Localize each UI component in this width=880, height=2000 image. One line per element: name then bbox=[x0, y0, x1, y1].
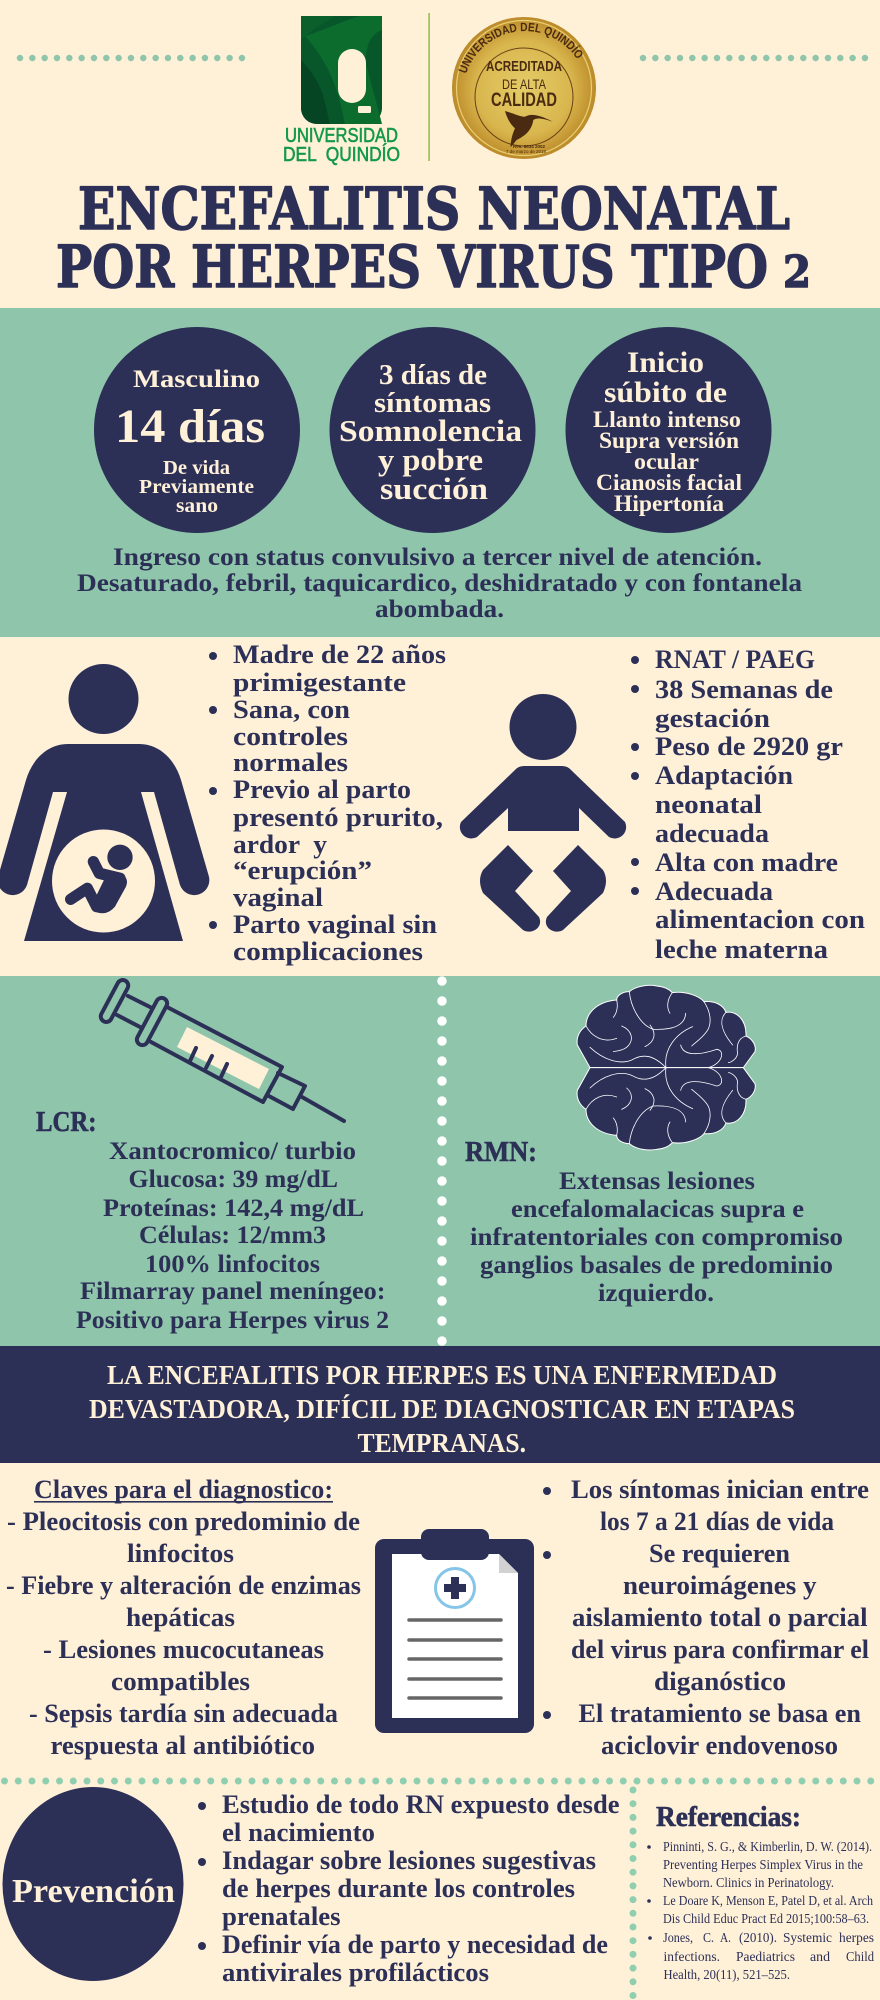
list: síntomas y tratamiento: Los síntomas inician entre bbox=[571, 1475, 869, 1504]
text: claves para el diagnostico: - Sepsis tardía sin adecuada bbox=[29, 1699, 338, 1728]
list: prevención: prenatales bbox=[222, 1902, 341, 1931]
circle: edad: De vida bbox=[163, 457, 230, 479]
accreditation seal: 7 de marzo de 2018 bbox=[506, 149, 547, 154]
logo divider bbox=[428, 13, 430, 161]
circle: inicio súbito: Hipertonía bbox=[614, 491, 724, 516]
text: LCR: Glucosa: 39 mg/dL bbox=[128, 1166, 338, 1193]
list: madre: primigestante bbox=[233, 668, 406, 697]
list: recién nacido: 38 Semanas de bbox=[655, 675, 833, 704]
circle: inicio súbito: súbito de bbox=[604, 376, 727, 409]
list: madre: Madre de 22 años bbox=[233, 640, 446, 669]
references bbox=[647, 1801, 874, 1983]
list: madre: “erupción” bbox=[233, 856, 372, 885]
circle: síntomas: 3 días de bbox=[379, 360, 487, 391]
list: recién nacido: leche materna bbox=[655, 935, 828, 964]
list: madre: vaginal bbox=[233, 883, 323, 912]
list: recién nacido: alimentacion con bbox=[655, 905, 866, 934]
banner: mensaje clave: TEMPRANAS. bbox=[358, 1428, 526, 1458]
icon: syringe bbox=[99, 978, 344, 1121]
circle: prevención bbox=[2, 1787, 184, 1981]
list: madre: complicaciones bbox=[233, 937, 423, 966]
text: ingreso: abombada. bbox=[375, 596, 504, 623]
list: recién nacido: adecuada bbox=[655, 819, 769, 848]
list: síntomas y tratamiento: El tratamiento se basa en bbox=[578, 1699, 862, 1728]
circle: inicio súbito: ocular bbox=[634, 449, 699, 474]
list: síntomas y tratamiento: aislamiento total o parcial bbox=[572, 1603, 868, 1632]
icon: pregnant mother bbox=[0, 664, 209, 941]
list: madre bbox=[209, 640, 446, 966]
text: claves para el diagnostico: respuesta al antibiótico bbox=[50, 1731, 315, 1760]
list: síntomas y tratamiento: Se requieren bbox=[649, 1539, 791, 1568]
text: claves para el diagnostico bbox=[6, 1475, 361, 1760]
reference list: Newborn. Clinics in Perinatology. bbox=[663, 1876, 834, 1891]
dotted accent right bbox=[643, 55, 867, 61]
text: LCR: Proteínas: 142,4 mg/dL bbox=[103, 1195, 364, 1222]
list: recién nacido: RNAT / PAEG bbox=[655, 645, 815, 674]
list: madre: controles bbox=[233, 722, 348, 751]
university logo bbox=[283, 16, 400, 166]
heading: claves: Claves para el diagnostico: bbox=[34, 1475, 333, 1504]
accreditation seal: ACREDITADA bbox=[486, 58, 562, 75]
title: 2 bbox=[783, 247, 811, 298]
panel: estudios bbox=[0, 976, 880, 1346]
circle: inicio súbito: Supra versión bbox=[599, 428, 739, 453]
list: madre: Sana, con bbox=[233, 695, 351, 724]
list: prevención: el nacimiento bbox=[222, 1818, 375, 1847]
circle: edad: sano bbox=[176, 495, 218, 517]
reference list: C. bbox=[703, 1931, 714, 1946]
list: prevención: de herpes durante los controles bbox=[222, 1874, 575, 1903]
circle: inicio súbito: Cianosis facial bbox=[596, 470, 742, 495]
title bbox=[56, 175, 811, 301]
panel: antecedentes bbox=[0, 637, 880, 976]
circle: síntomas bbox=[330, 327, 536, 533]
text: claves para el diagnostico: - Lesiones mucocutaneas bbox=[43, 1635, 324, 1664]
circle: síntomas: síntomas bbox=[374, 388, 491, 419]
banner: mensaje clave bbox=[0, 1346, 880, 1463]
list: recién nacido: Adaptación bbox=[655, 761, 794, 790]
list: recién nacido: gestación bbox=[655, 704, 771, 733]
accreditation seal: Res. 8834 2002 bbox=[513, 144, 546, 149]
text: ingreso: Desaturado, febril, taquicardico, deshidratado y con fontanela bbox=[77, 570, 803, 597]
list: recién nacido bbox=[631, 645, 866, 964]
dotted accent left bbox=[20, 55, 242, 61]
text: RMN: ganglios basales de predominio bbox=[480, 1252, 833, 1279]
circle: prevención: Prevención bbox=[12, 1873, 175, 1910]
text: LCR: Positivo para Herpes virus 2 bbox=[76, 1307, 389, 1334]
list: síntomas y tratamiento: del virus para confirmar el bbox=[571, 1635, 869, 1664]
text: claves para el diagnostico: hepáticas bbox=[126, 1603, 235, 1632]
dotted divider bbox=[437, 981, 447, 1342]
list: prevención: Definir vía de parto y necesidad de bbox=[222, 1930, 608, 1959]
list: madre: normales bbox=[233, 748, 348, 777]
text: ingreso bbox=[77, 544, 803, 623]
university logo: DEL QUINDÍO bbox=[283, 143, 400, 166]
text: RMN: encefalomalacicas supra e bbox=[511, 1196, 804, 1223]
circle: síntomas: succión bbox=[380, 471, 488, 506]
reference list: Health, 20(11), 521–525. bbox=[664, 1968, 790, 1983]
list: madre: presentó prurito, bbox=[233, 803, 443, 832]
heading: referencias: Referencias: bbox=[656, 1801, 801, 1833]
list: síntomas y tratamiento: neuroimágenes y bbox=[623, 1571, 816, 1600]
text: LCR: LCR: bbox=[36, 1107, 96, 1138]
text: LCR: Células: 12/mm3 bbox=[139, 1222, 326, 1249]
list: madre: Parto vaginal sin bbox=[233, 910, 438, 939]
accreditation seal: UNIVERSIDAD DEL QUINDÍO bbox=[458, 22, 582, 73]
reference list: herpes bbox=[839, 1931, 874, 1946]
accreditation seal: DE ALTA bbox=[502, 76, 547, 92]
reference list: Child bbox=[846, 1950, 874, 1965]
text: claves para el diagnostico: compatibles bbox=[111, 1667, 250, 1696]
header: logos and dotted accents bbox=[16, 13, 868, 166]
text: claves para el diagnostico: - Fiebre y alteración de enzimas bbox=[6, 1571, 361, 1600]
list: prevención: antivirales profilácticos bbox=[222, 1958, 489, 1987]
list: prevención bbox=[198, 1790, 620, 1987]
list: síntomas y tratamiento: diganóstico bbox=[654, 1667, 786, 1696]
list: síntomas y tratamiento: aciclovir endovenoso bbox=[601, 1731, 838, 1760]
text: claves para el diagnostico: linfocitos bbox=[127, 1539, 234, 1568]
text: RMN bbox=[465, 1137, 843, 1307]
reference list bbox=[647, 1840, 874, 1983]
icon: clipboard bbox=[375, 1529, 534, 1733]
circle: inicio súbito bbox=[566, 327, 772, 533]
list: síntomas y tratamiento: los 7 a 21 días de vida bbox=[600, 1507, 834, 1536]
list: prevención: Indagar sobre lesiones sugestivas bbox=[222, 1846, 596, 1875]
list: recién nacido: Adecuada bbox=[655, 877, 773, 906]
list: recién nacido: Alta con madre bbox=[655, 848, 838, 877]
text: LCR: 100% linfocitos bbox=[145, 1251, 320, 1278]
reference list: and bbox=[810, 1950, 830, 1965]
list: síntomas y tratamiento bbox=[543, 1475, 869, 1760]
list: madre: Previo al parto bbox=[233, 775, 411, 804]
circle: síntomas: y pobre bbox=[378, 442, 483, 477]
reference list: infections. bbox=[664, 1950, 720, 1965]
icon: baby bbox=[460, 694, 626, 932]
reference list: Paediatrics bbox=[736, 1950, 795, 1965]
accreditation seal: CALIDAD bbox=[491, 90, 557, 111]
circle: edad bbox=[94, 327, 300, 533]
panel: presentación clínica bbox=[0, 308, 880, 637]
reference list: A. bbox=[720, 1931, 731, 1946]
circle: síntomas: Somnolencia bbox=[339, 413, 523, 448]
text: claves para el diagnostico: - Pleocitosis con predominio de bbox=[7, 1507, 360, 1536]
icon: brain bbox=[577, 985, 755, 1150]
text: RMN: Extensas lesiones bbox=[559, 1168, 755, 1195]
list: prevención: Estudio de todo RN expuesto desde bbox=[222, 1790, 620, 1819]
circle: inicio súbito: Llanto intenso bbox=[593, 407, 741, 432]
text: RMN: infratentoriales con compromiso bbox=[470, 1224, 843, 1251]
text: LCR bbox=[36, 1107, 389, 1334]
circle: edad: Previamente bbox=[139, 476, 254, 498]
text: RMN: RMN: bbox=[465, 1137, 537, 1168]
banner: mensaje clave: LA ENCEFALITIS POR HERPES ES UNA ENFERMEDAD bbox=[107, 1360, 777, 1390]
circle: inicio súbito: Inicio bbox=[627, 346, 704, 379]
list: madre: ardor y bbox=[233, 830, 327, 859]
list: recién nacido: neonatal bbox=[655, 790, 762, 819]
reference list: Preventing Herpes Simplex Virus in the bbox=[663, 1858, 863, 1873]
university logo: UNIVERSIDAD bbox=[285, 125, 398, 147]
reference list: Jones, bbox=[663, 1931, 693, 1946]
dotted separator vertical bbox=[630, 1790, 636, 2000]
list: recién nacido: Peso de 2920 gr bbox=[655, 732, 843, 761]
circle: edad: 14 días bbox=[115, 400, 265, 453]
reference list: Systemic bbox=[783, 1931, 832, 1946]
banner: mensaje clave: DEVASTADORA, DIFÍCIL DE DIAGNOSTICAR EN ETAPAS bbox=[89, 1394, 795, 1424]
text: LCR: Filmarray panel meníngeo: bbox=[80, 1278, 386, 1305]
circle: edad: Masculino bbox=[133, 366, 260, 393]
text: RMN: izquierdo. bbox=[598, 1280, 714, 1307]
accreditation seal bbox=[452, 17, 596, 159]
text: ingreso: Ingreso con status convulsivo a tercer nivel de atención. bbox=[113, 544, 762, 571]
reference list: (2010). bbox=[739, 1931, 777, 1946]
dotted separator horizontal bbox=[4, 1778, 880, 1784]
text: LCR: Xantocromico/ turbio bbox=[109, 1138, 356, 1165]
